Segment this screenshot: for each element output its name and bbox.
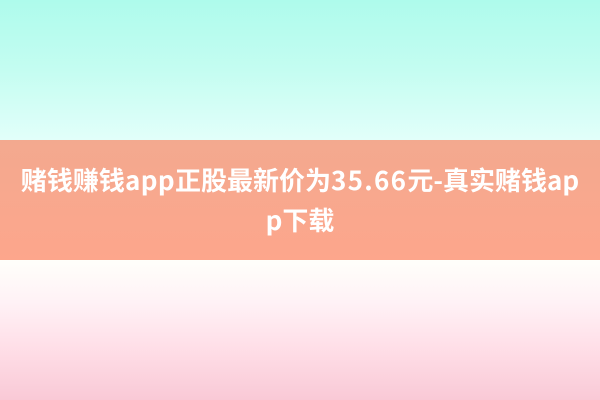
bottom gradient band (0, 260, 600, 400)
title: p下载 (266, 201, 334, 238)
title: 赌钱赚钱app正股最新价为35.66元-真实赌钱ap (21, 161, 579, 198)
title (21, 161, 579, 238)
top gradient band (0, 0, 600, 140)
title banner (0, 140, 600, 260)
